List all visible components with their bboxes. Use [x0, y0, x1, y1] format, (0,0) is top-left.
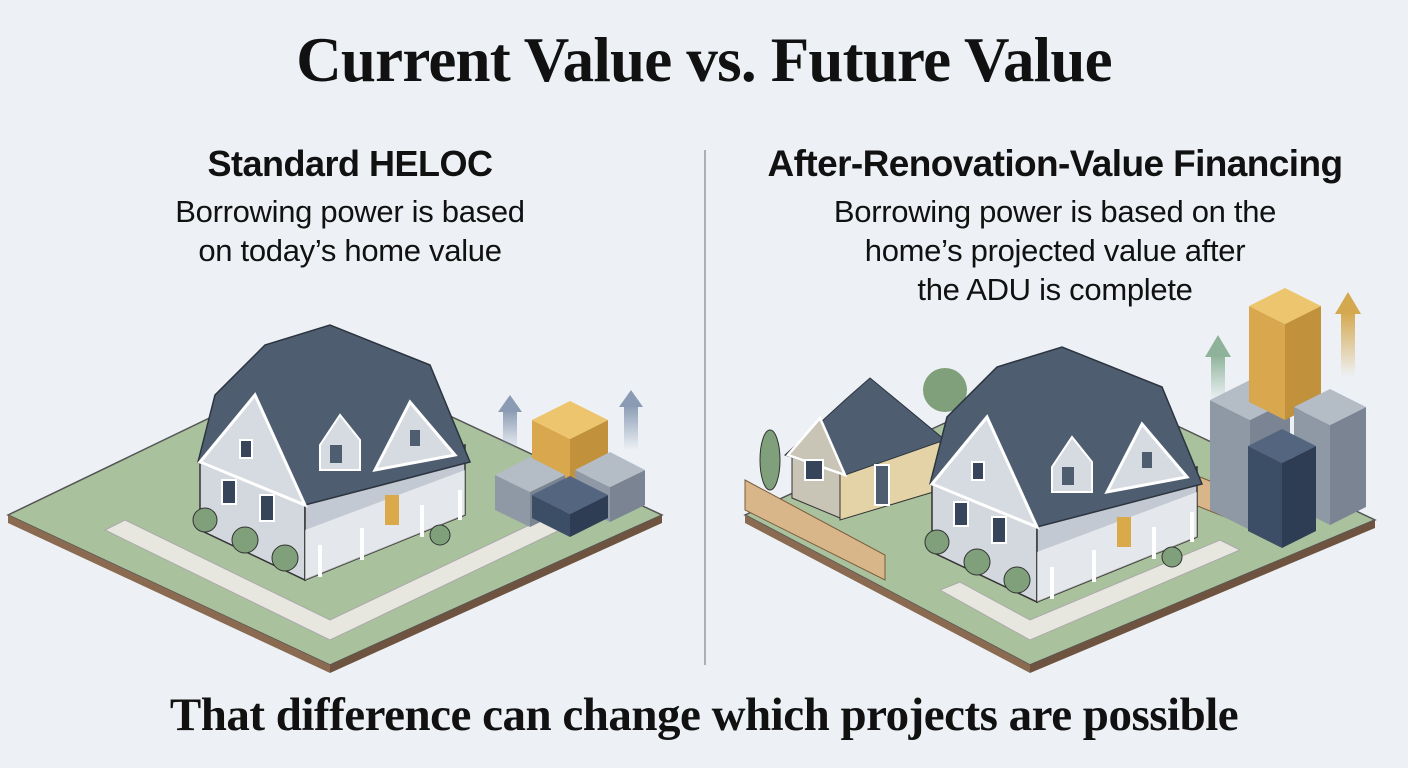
right heading: After-Renovation-Value Financing [768, 143, 1342, 184]
right blocks [1210, 288, 1366, 548]
right scene [745, 288, 1375, 673]
left body text [175, 194, 525, 268]
left body text: Borrowing power is based [175, 194, 525, 229]
left body text: on today’s home value [198, 233, 502, 268]
right body text: Borrowing power is based on the [834, 194, 1276, 229]
ground left [8, 360, 662, 665]
title: Current Value vs. Future Value [296, 25, 1112, 95]
bottom caption: That difference can change which projects are possible [170, 689, 1238, 741]
left scene [8, 325, 662, 673]
arrows left [498, 395, 522, 450]
ADU [785, 378, 945, 520]
ground right [745, 370, 1375, 665]
arrows right [1205, 335, 1231, 400]
right body text: the ADU is complete [917, 272, 1193, 307]
divider [704, 150, 706, 665]
right body text: home’s projected value after [865, 233, 1245, 268]
left heading: Standard HELOC [207, 143, 493, 184]
fence [745, 480, 885, 580]
left blocks [495, 401, 645, 537]
right body text [834, 194, 1276, 307]
tree [923, 368, 967, 412]
